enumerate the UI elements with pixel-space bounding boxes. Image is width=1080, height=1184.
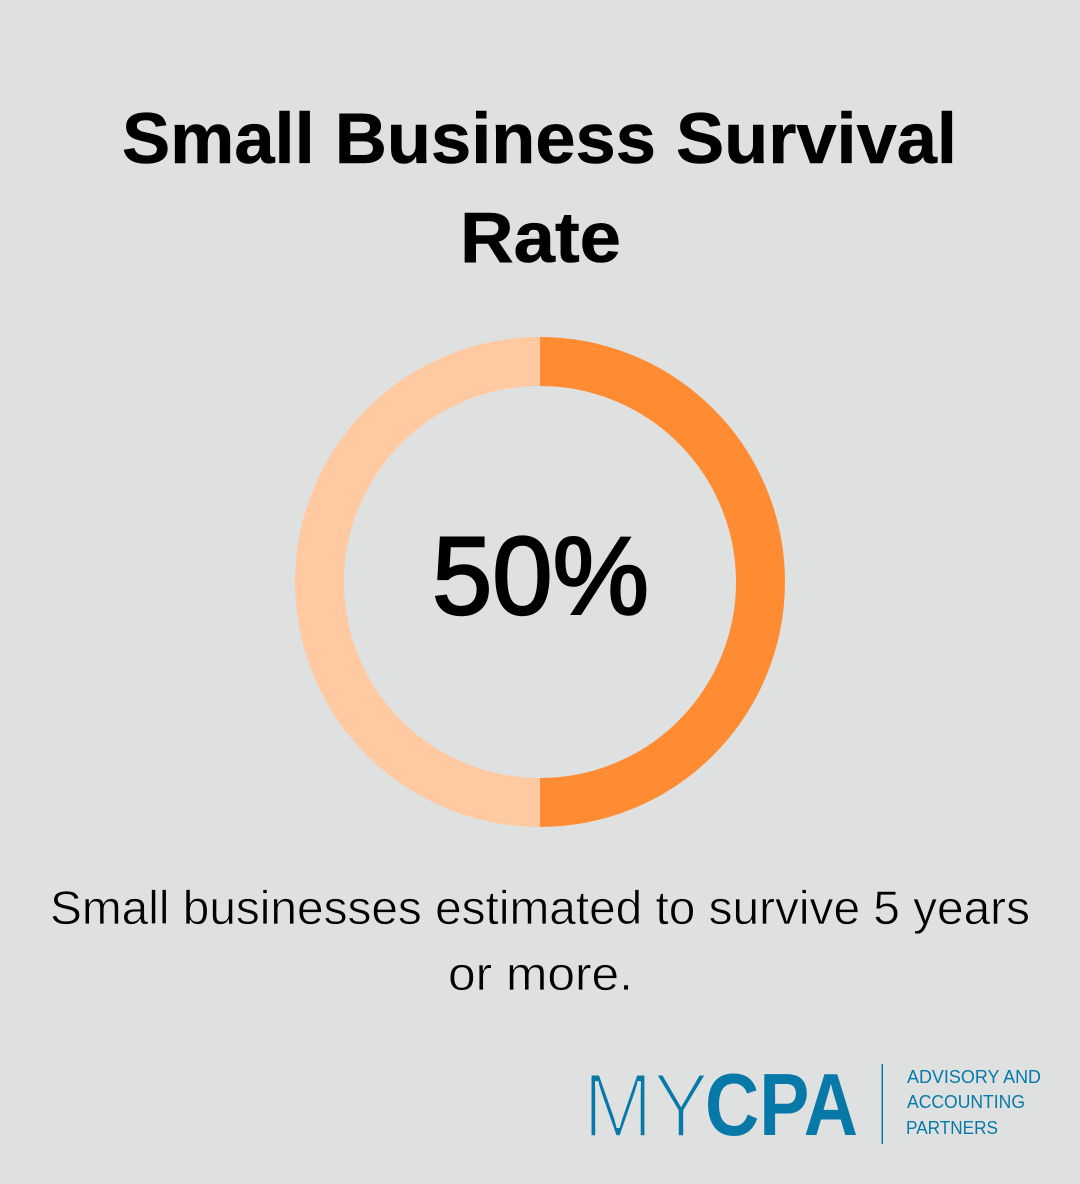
logo tagline: PARTNERS <box>906 1117 998 1138</box>
title <box>122 100 957 278</box>
donut remainder segment <box>320 362 540 802</box>
logo wordmark <box>583 1055 858 1157</box>
title: Small Business Survival <box>122 100 957 179</box>
description text: or more. <box>448 947 633 1000</box>
donut value segment <box>540 362 760 802</box>
logo tagline: ADVISORY AND <box>907 1066 1041 1087</box>
donut chart: 50 percent <box>320 362 760 802</box>
logo: MYCPA <box>583 1055 1041 1157</box>
description text: Small businesses estimated to survive 5 years <box>50 881 1030 934</box>
logo wordmark: CPA <box>705 1055 858 1154</box>
title: Rate <box>460 199 621 278</box>
logo wordmark: MY <box>583 1055 709 1157</box>
logo tagline: ACCOUNTING <box>907 1091 1025 1112</box>
description text <box>50 881 1030 1000</box>
logo tagline <box>906 1066 1041 1138</box>
center value: 50% <box>432 515 649 638</box>
